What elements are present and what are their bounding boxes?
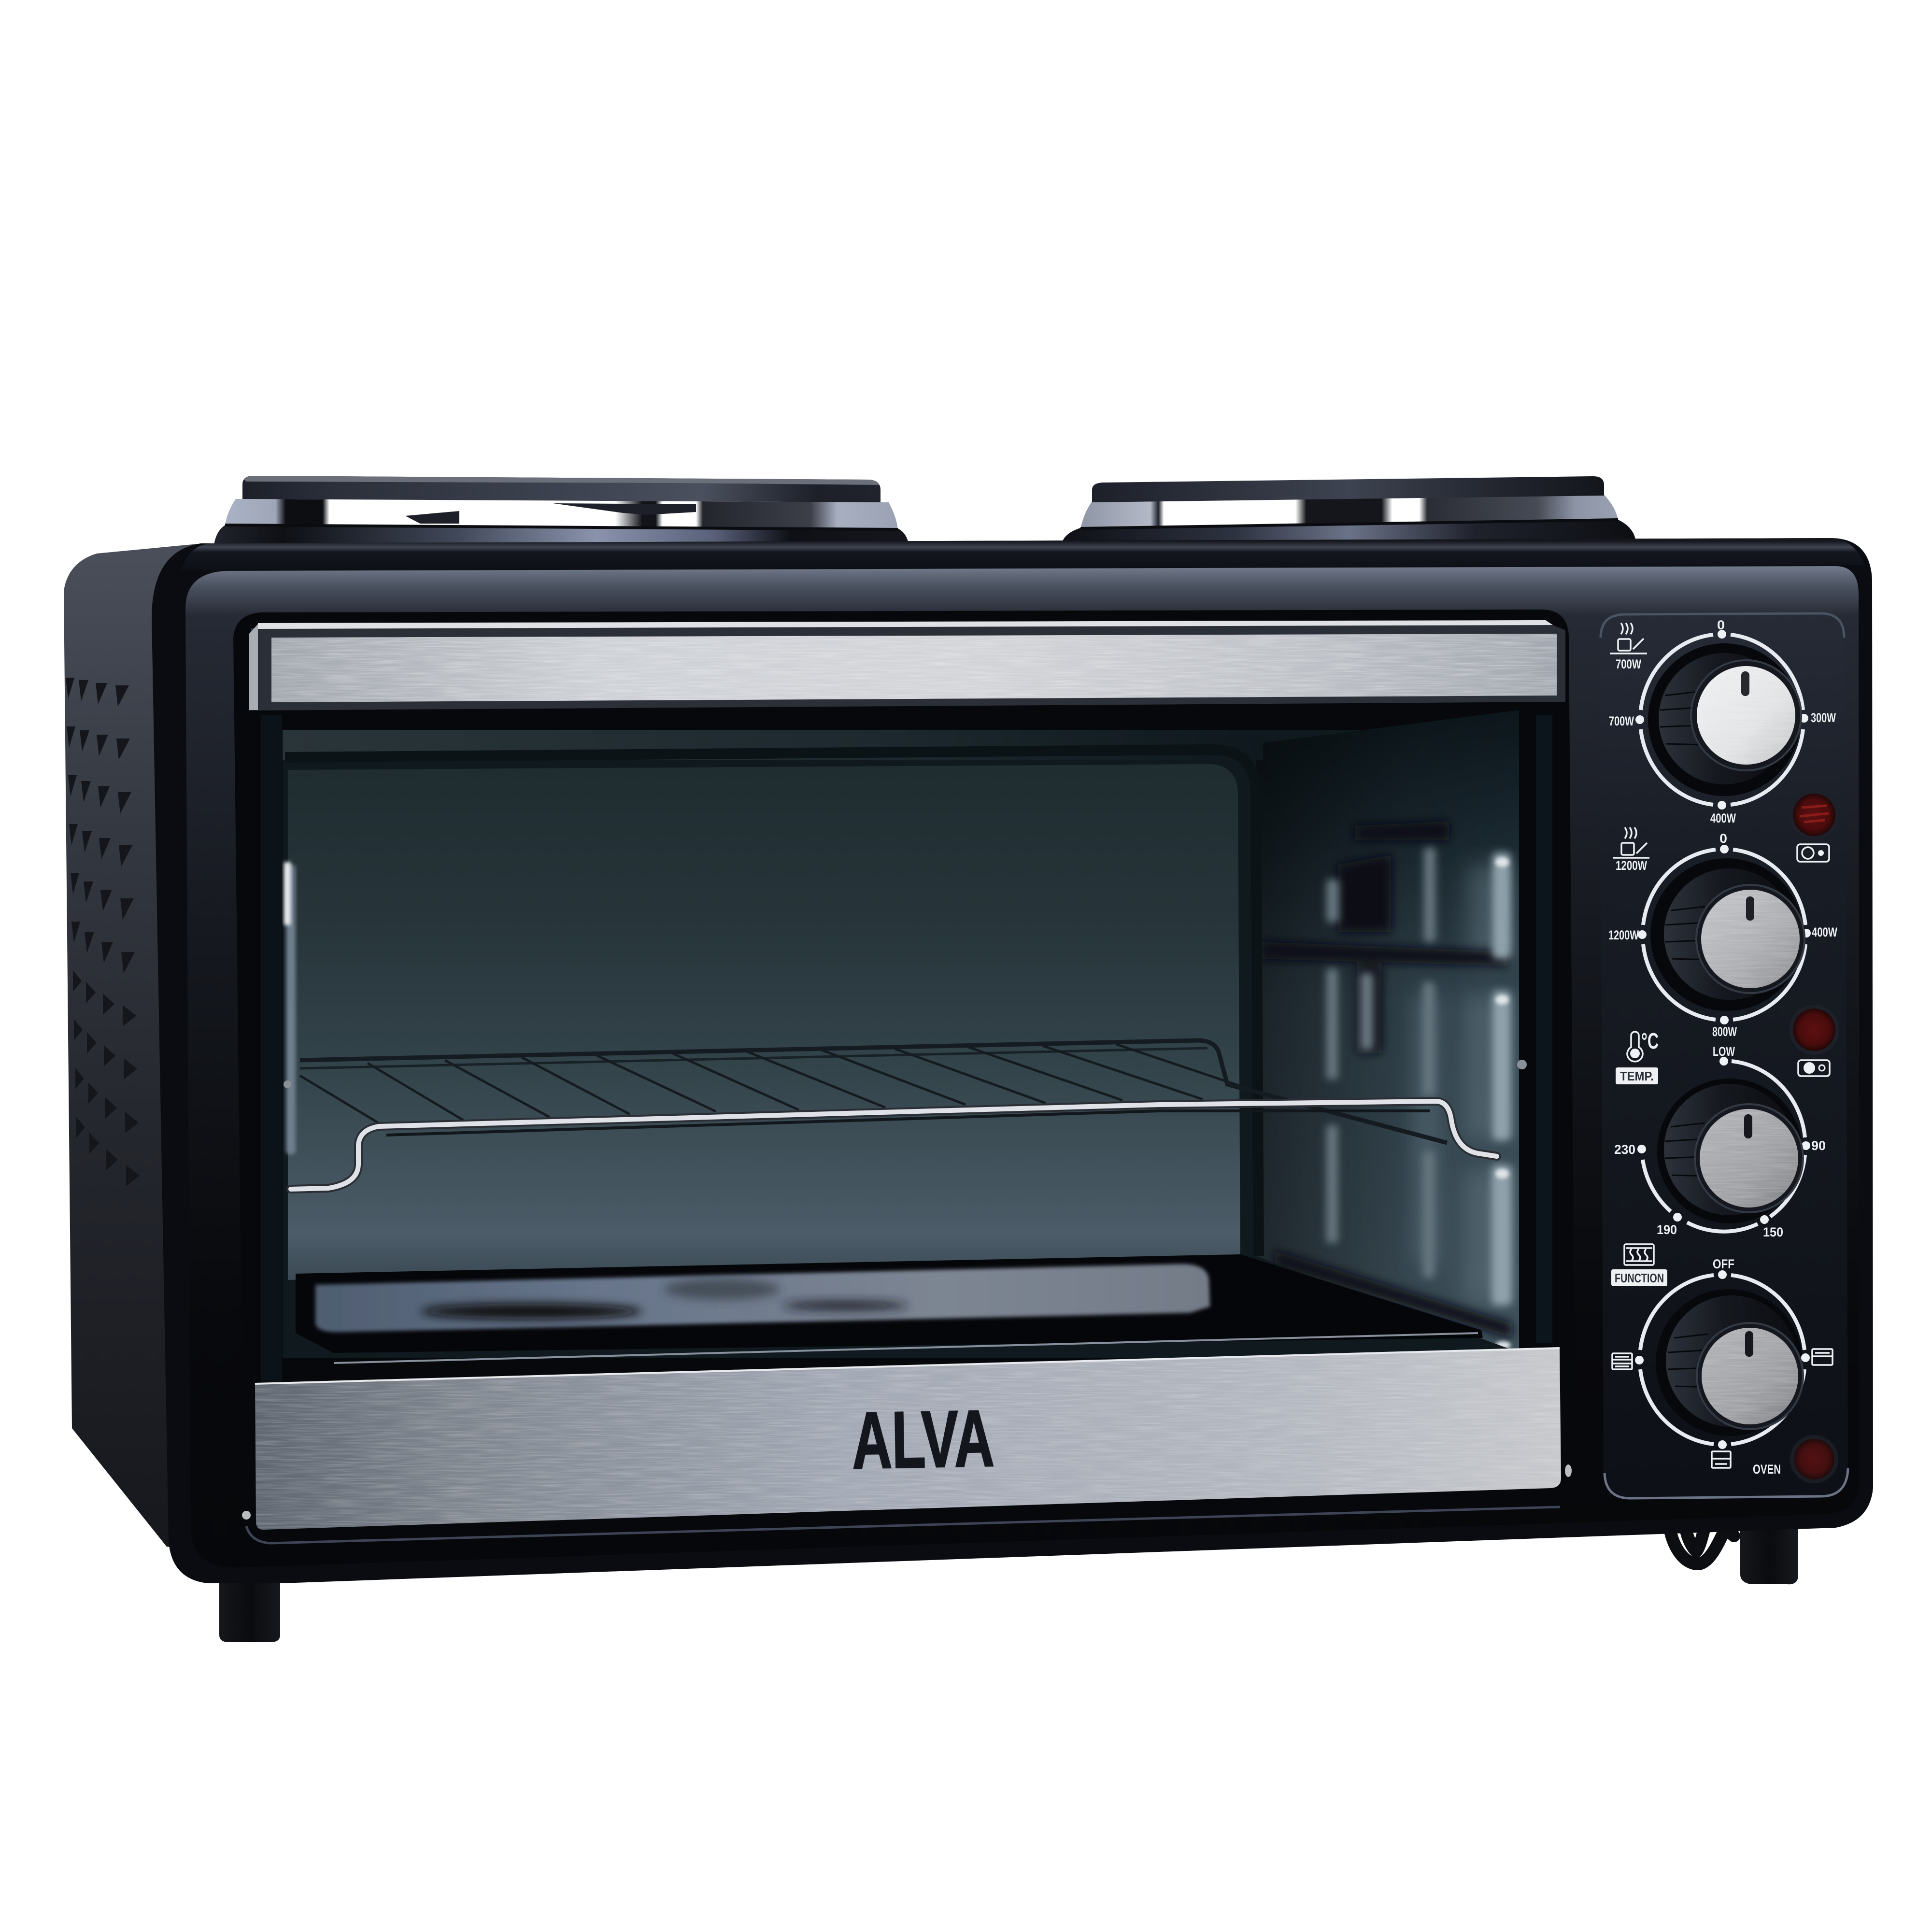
right inner screw xyxy=(1517,1060,1527,1069)
top edge strip xyxy=(181,538,1864,571)
knob body xyxy=(1730,1150,1749,1158)
dial labels: OFF xyxy=(1713,1257,1734,1271)
knob 1: 700W hob xyxy=(1635,630,1808,810)
dial labels: 700W xyxy=(1616,657,1641,671)
dial recess xyxy=(1650,858,1803,1011)
dial labels: LOW xyxy=(1713,1044,1735,1059)
indicator light: oven xyxy=(1790,1435,1838,1483)
handle stainless face xyxy=(271,634,1557,702)
dial labels: 230 xyxy=(1614,1142,1635,1157)
plate right screw xyxy=(1565,1464,1572,1477)
knob skirt xyxy=(1666,1295,1797,1427)
icon: top and bottom heat xyxy=(1612,1353,1632,1369)
door screws xyxy=(284,1060,1527,1088)
icon: 700W hot plate xyxy=(1610,623,1647,653)
dial labels: 700W xyxy=(1609,714,1634,728)
dial labels: 400W xyxy=(1710,811,1736,825)
side ventilation holes xyxy=(66,678,140,1186)
tray body xyxy=(296,1254,1483,1353)
icon: function elements xyxy=(1624,1244,1654,1265)
chrome reflections xyxy=(405,503,696,524)
left inner screw xyxy=(284,1080,291,1088)
indicator light: hot plate 1 xyxy=(1789,790,1839,840)
dark embossed shadows xyxy=(1261,821,1512,1338)
stainless plate xyxy=(255,1348,1561,1530)
control panel xyxy=(1600,612,1848,1499)
dial labels: 150 xyxy=(1763,1225,1783,1239)
dial ring xyxy=(1643,1061,1805,1232)
left wall highlight xyxy=(284,862,296,1154)
metal cap xyxy=(1700,1109,1798,1208)
icon: right plate indicator xyxy=(1798,1060,1830,1076)
back wall xyxy=(288,764,1240,1280)
icon: bottom heat xyxy=(1712,1451,1731,1468)
pointer notch xyxy=(1741,671,1749,696)
icon: left plate indicator xyxy=(1797,844,1829,862)
lower door plate xyxy=(242,1348,1572,1530)
oven interior xyxy=(261,710,1552,1381)
dial recess xyxy=(1657,1079,1802,1223)
thin line under chrome xyxy=(225,525,898,529)
soft glow around ribs xyxy=(1415,865,1512,1304)
plate brushed texture xyxy=(255,1348,1561,1530)
right wall shade xyxy=(1256,710,1519,1352)
handle brushed texture xyxy=(271,634,1557,702)
panel plate xyxy=(1600,612,1848,1499)
knob rim xyxy=(1691,660,1801,770)
dial labels: OVEN xyxy=(1753,1462,1781,1477)
rack back rail xyxy=(300,1040,1447,1143)
plate left screw xyxy=(242,1511,251,1520)
dial labels: 400W xyxy=(1812,925,1837,939)
tray glossy floor xyxy=(315,1264,1210,1332)
metal cap xyxy=(1701,890,1800,988)
dial labels: 1200W xyxy=(1616,858,1647,873)
knob body xyxy=(1730,934,1750,939)
handle chrome left end xyxy=(249,624,258,710)
dial recess xyxy=(1648,643,1801,796)
metal cap texture xyxy=(1697,666,1795,765)
right wall ribs xyxy=(1261,821,1512,1349)
pointer notch xyxy=(1746,896,1754,921)
door bottom highlight xyxy=(246,1507,1560,1543)
oven illustration xyxy=(64,476,1873,1642)
sliver bright top xyxy=(284,862,291,925)
panel bottom rim xyxy=(1605,1468,1848,1498)
pointer notch xyxy=(1744,1114,1752,1138)
left hot plate xyxy=(214,476,909,546)
sliver of side wall xyxy=(286,865,296,1154)
oven floor lip line xyxy=(334,1333,1478,1363)
pointer notch xyxy=(1745,1331,1753,1357)
metal cap texture xyxy=(1701,890,1800,988)
tray reflections xyxy=(420,1279,908,1319)
knob skirt xyxy=(1664,868,1795,1000)
knob grooves xyxy=(1668,1334,1713,1387)
dial dots xyxy=(1635,1270,1810,1449)
oven door recess xyxy=(233,610,1576,1543)
dial ring xyxy=(1640,1275,1804,1444)
burner top cap xyxy=(242,476,881,502)
dial ring xyxy=(1641,635,1803,805)
metal cap xyxy=(1697,666,1795,765)
dial dots xyxy=(1635,630,1808,810)
bright spots xyxy=(1495,857,1511,1349)
side panel xyxy=(64,543,208,1553)
cap top edge xyxy=(244,476,880,485)
burner base ring xyxy=(214,524,909,546)
knob body xyxy=(1732,1361,1750,1376)
icon: thermometer and degrees xyxy=(1627,1028,1659,1062)
metal cap texture xyxy=(1702,1328,1798,1424)
plate top highlight xyxy=(255,1348,1560,1384)
chrome ring xyxy=(1080,495,1618,528)
ALVA logo: ALVA xyxy=(851,1394,995,1486)
dial labels: 300W xyxy=(1811,710,1836,725)
icon: thermometer and degrees: °C xyxy=(1641,1028,1659,1053)
metal cap texture xyxy=(1700,1109,1798,1208)
main body shell xyxy=(152,538,1873,1583)
dial dots xyxy=(1638,845,1811,1024)
knob grooves xyxy=(1660,692,1703,745)
right hot plate xyxy=(1062,476,1635,544)
knob grooves xyxy=(1665,1123,1709,1176)
back wall flange xyxy=(285,750,1259,1256)
left door frame strip xyxy=(261,715,282,1381)
panel top rim xyxy=(1601,613,1844,638)
dial labels xyxy=(1608,618,1837,1477)
top door handle xyxy=(249,620,1565,710)
left foot xyxy=(219,1575,280,1642)
chrome rail shadow xyxy=(291,1101,1497,1189)
FUNCTION label: FUNCTION xyxy=(1615,1271,1664,1285)
knob 2: 1200W hob xyxy=(1638,845,1811,1024)
power cable xyxy=(1669,1526,1734,1564)
knob rim xyxy=(1695,1104,1803,1212)
dial labels: 90 xyxy=(1811,1138,1826,1153)
handle frame xyxy=(249,623,1565,710)
interior base xyxy=(283,730,1519,1358)
dial labels: 0 xyxy=(1717,618,1725,632)
icon: top heat xyxy=(1812,1349,1833,1365)
knob skirt xyxy=(1659,653,1790,784)
right foot xyxy=(1740,1521,1798,1584)
right wall xyxy=(1256,710,1519,1352)
dial labels: 800W xyxy=(1712,1024,1737,1039)
wire rack xyxy=(291,1040,1497,1189)
oven ceiling xyxy=(283,730,1263,760)
rack lower wire xyxy=(386,1111,1430,1135)
baking tray xyxy=(296,1254,1483,1363)
metal cap xyxy=(1702,1328,1798,1424)
dial labels: 0 xyxy=(1719,831,1727,846)
rack back rail second line xyxy=(300,1048,1208,1068)
icon: 1200W hot plate xyxy=(1613,827,1649,858)
dial ring xyxy=(1643,850,1805,1020)
burner base ring xyxy=(1062,520,1635,544)
dial recess xyxy=(1656,1289,1803,1436)
light rib highlights xyxy=(1492,852,1512,1305)
knob body xyxy=(1724,715,1746,719)
chrome ring xyxy=(225,499,898,529)
right door frame strip xyxy=(1536,715,1552,1343)
TEMP label: TEMP. xyxy=(1620,1069,1654,1083)
knob rim xyxy=(1697,1323,1803,1429)
dial labels: 190 xyxy=(1657,1222,1677,1237)
dial labels: 1200W xyxy=(1608,928,1639,942)
thin line under chrome xyxy=(1080,520,1618,528)
knob grooves xyxy=(1665,907,1710,960)
knob rim xyxy=(1696,885,1804,993)
raised front face xyxy=(185,566,1860,1567)
knob 3: temperature xyxy=(1637,1057,1810,1232)
handle chrome top edge xyxy=(258,620,1553,629)
knob skirt xyxy=(1664,1084,1795,1215)
indicator light: hot plate 2 xyxy=(1789,1005,1839,1055)
dial dots xyxy=(1637,1057,1810,1224)
chrome rail xyxy=(291,1101,1497,1189)
burner top cap xyxy=(1092,476,1604,502)
FUNCTION label xyxy=(1611,1269,1667,1286)
rack cross wires xyxy=(300,1044,1280,1124)
knob 4: function xyxy=(1635,1270,1810,1449)
